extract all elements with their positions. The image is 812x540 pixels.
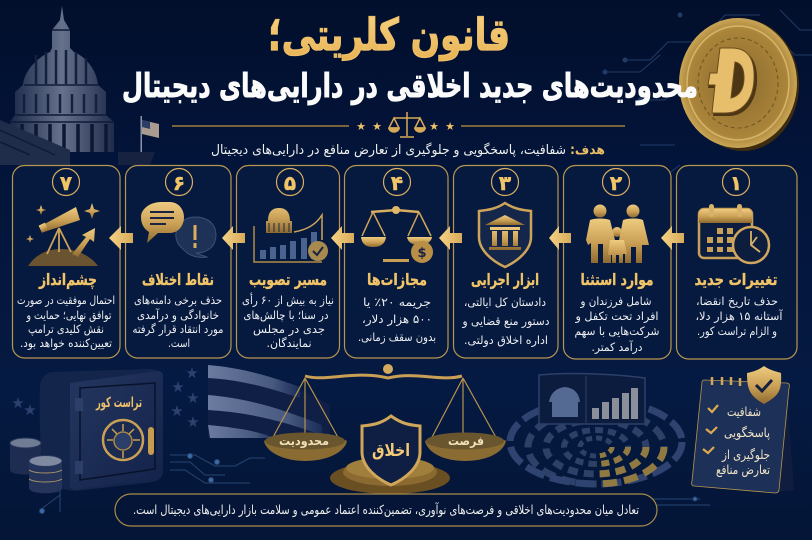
- body text: [17, 293, 115, 351]
- panel: card 1 new changes: [676, 166, 797, 359]
- circuit pattern: bottom: [40, 454, 710, 514]
- body text: اداره اخلاق دولتی.: [464, 333, 548, 348]
- body text: خانوادگی و درآمدی: [137, 308, 219, 323]
- body text: [696, 294, 783, 339]
- icon: telescope: [26, 203, 100, 266]
- icon: capitol building: [0, 6, 155, 165]
- body text: [358, 295, 436, 345]
- heading: مجازات‌ها: [367, 270, 427, 289]
- body text: نیاز به بیش از ۶۰ رأی: [242, 292, 334, 308]
- conclusion banner: [115, 494, 657, 526]
- notepad rings: [712, 377, 740, 386]
- left pan: محدودیت: [279, 434, 329, 449]
- ethics shield: [362, 416, 420, 485]
- panel: card 2 exceptions: [564, 166, 671, 359]
- body text: درآمد کمتر.: [592, 340, 642, 355]
- panel: card 6 disputes: [126, 166, 231, 358]
- body text: حذف تاریخ انقضا،: [696, 294, 778, 309]
- icon: scales with dollar coin: $: [417, 246, 427, 261]
- number 6: ۶: [173, 171, 185, 195]
- checklist: تعارض منافع: [716, 462, 770, 478]
- american flag backdrop: ★: [186, 389, 200, 407]
- heading: نقاط اختلاف: [142, 270, 214, 289]
- checklist: پاسخگویی: [724, 425, 770, 441]
- screen: [539, 374, 645, 424]
- number 4: ۴: [391, 171, 403, 195]
- body text: دستور منع قضایی و: [462, 314, 550, 329]
- icon: safe blind trust: [40, 369, 163, 491]
- icon: flag on pole: [140, 116, 159, 152]
- body text: حذف برخی دامنه‌های: [134, 293, 222, 308]
- body text: [462, 295, 550, 348]
- arrows between cards: [109, 226, 684, 250]
- panel: card 3 enforcement: [454, 166, 558, 358]
- right pan: [425, 378, 506, 461]
- american flag backdrop: ★: [11, 394, 25, 412]
- goal statement: هدف: شفافیت، پاسخگویی و جلوگیری از تعارض منافع در دارایی‌های دیجیتال: [211, 142, 605, 158]
- title line 1: قانون کلریتی؛: [268, 10, 510, 61]
- number 5: ۵: [284, 171, 296, 195]
- icon: speech bubbles: [141, 202, 216, 258]
- body text: آستانه ۱۵ هزار دلا،: [696, 309, 783, 324]
- body text: جدی در مجلس: [253, 322, 325, 337]
- american flag backdrop: ★: [170, 402, 184, 420]
- number 1: ۱: [730, 171, 742, 195]
- checklist: [703, 404, 770, 478]
- seats: [510, 400, 682, 484]
- number 4: [384, 168, 410, 196]
- icon: parliament chamber: [510, 374, 682, 484]
- panel: card 4 penalties: [344, 166, 448, 358]
- number 3: ۳: [499, 171, 511, 195]
- divider with scales and stars: [172, 112, 625, 137]
- body text: دادستان کل ایالتی،: [464, 295, 546, 309]
- number 2: ۲: [610, 171, 622, 195]
- shield badge: [747, 366, 781, 404]
- number 1: [722, 168, 750, 196]
- number 7: [52, 168, 80, 196]
- icon: small scales: [389, 112, 425, 137]
- body text: بدون سقف زمانی.: [358, 330, 436, 345]
- body text: تعیین‌کننده خواهد بود.: [20, 336, 112, 351]
- stars: [356, 120, 455, 133]
- checklist: جلوگیری از: [721, 447, 770, 463]
- heading: چشم‌انداز: [38, 270, 97, 290]
- stars: ★: [356, 120, 366, 133]
- body text: [574, 294, 660, 355]
- body text: شامل فرزندان و: [580, 294, 652, 309]
- icon: balance scale with ethics shield: [264, 364, 506, 494]
- american flag backdrop: [11, 364, 330, 445]
- icon: shield with courthouse: [479, 203, 531, 267]
- heading: تغییرات جدید: [694, 270, 778, 289]
- body text: جریمه ۲۰٪ یا: [363, 295, 431, 310]
- icon: capitol and chart: [254, 201, 328, 262]
- safe handle: [148, 427, 154, 455]
- icon: scales with dollar coin: [361, 206, 433, 263]
- icon: coin stacks: [10, 438, 62, 493]
- safe dial: [103, 420, 143, 460]
- body text: افراد تحت تکفل و: [575, 309, 658, 324]
- left pan: [264, 378, 347, 461]
- heading: مسیر تصویب: [249, 270, 327, 289]
- number 5: [276, 168, 304, 196]
- right pan: فرصت: [448, 434, 484, 448]
- heading: ابزار اجرایی: [471, 270, 539, 289]
- checklist: شفافیت: [727, 404, 761, 419]
- body text: ۵۰۰ هزار دلار،: [362, 312, 432, 327]
- panel: card 5 passage path: [236, 166, 340, 358]
- body text: توافق نهایی؛ حمایت و: [26, 308, 112, 323]
- body text: شرکت‌هایی با سهم: [574, 324, 660, 339]
- body text: و الزام تراست کور.: [697, 324, 777, 339]
- scale beam and post: [305, 364, 462, 430]
- icon: gold coin: [679, 18, 799, 151]
- number 6: [166, 168, 192, 196]
- number 3: [492, 168, 518, 196]
- conclusion banner: تعادل میان محدودیت‌های اخلاقی و فرصت‌های نوآوری، تضمین‌کننده اعتماد عمومی و سلامت بازار دارایی‌های دیجیتال است.: [133, 502, 639, 518]
- body text: است.: [168, 336, 190, 350]
- icon: family: [586, 204, 649, 263]
- body text: مورد انتقاد قرار گرفته: [132, 322, 224, 337]
- american flag backdrop: ★: [185, 364, 199, 382]
- heading: موارد استثنا: [580, 270, 654, 289]
- number 2: [602, 168, 630, 196]
- body text: نمایندگان.: [266, 336, 312, 350]
- body text: [242, 292, 334, 350]
- icon: calendar and clock: [699, 204, 769, 263]
- american flag backdrop: ★: [23, 401, 37, 419]
- body text: [132, 293, 224, 350]
- stars: ★: [372, 120, 382, 133]
- body text: احتمال موفقیت در صورت: [17, 293, 115, 308]
- circuit pattern: top right: [603, 10, 812, 180]
- ethics shield: اخلاق: [372, 441, 410, 461]
- title: [122, 10, 698, 106]
- american flag backdrop: ★: [171, 378, 185, 396]
- icon: safe blind trust: تراست کور: [95, 395, 142, 411]
- number 7: ۷: [60, 171, 72, 195]
- stars: ★: [429, 120, 439, 133]
- body text: نقش کلیدی ترامپ: [28, 322, 104, 337]
- gold seats: [596, 447, 668, 488]
- american flag backdrop: ★: [186, 413, 200, 431]
- scale base: [330, 457, 450, 494]
- panel: card 7 outlook: [12, 166, 120, 358]
- stars: ★: [445, 120, 455, 133]
- panel: checklist notepad: [692, 366, 794, 493]
- body text: در سنا؛ با چالش‌های: [244, 308, 328, 323]
